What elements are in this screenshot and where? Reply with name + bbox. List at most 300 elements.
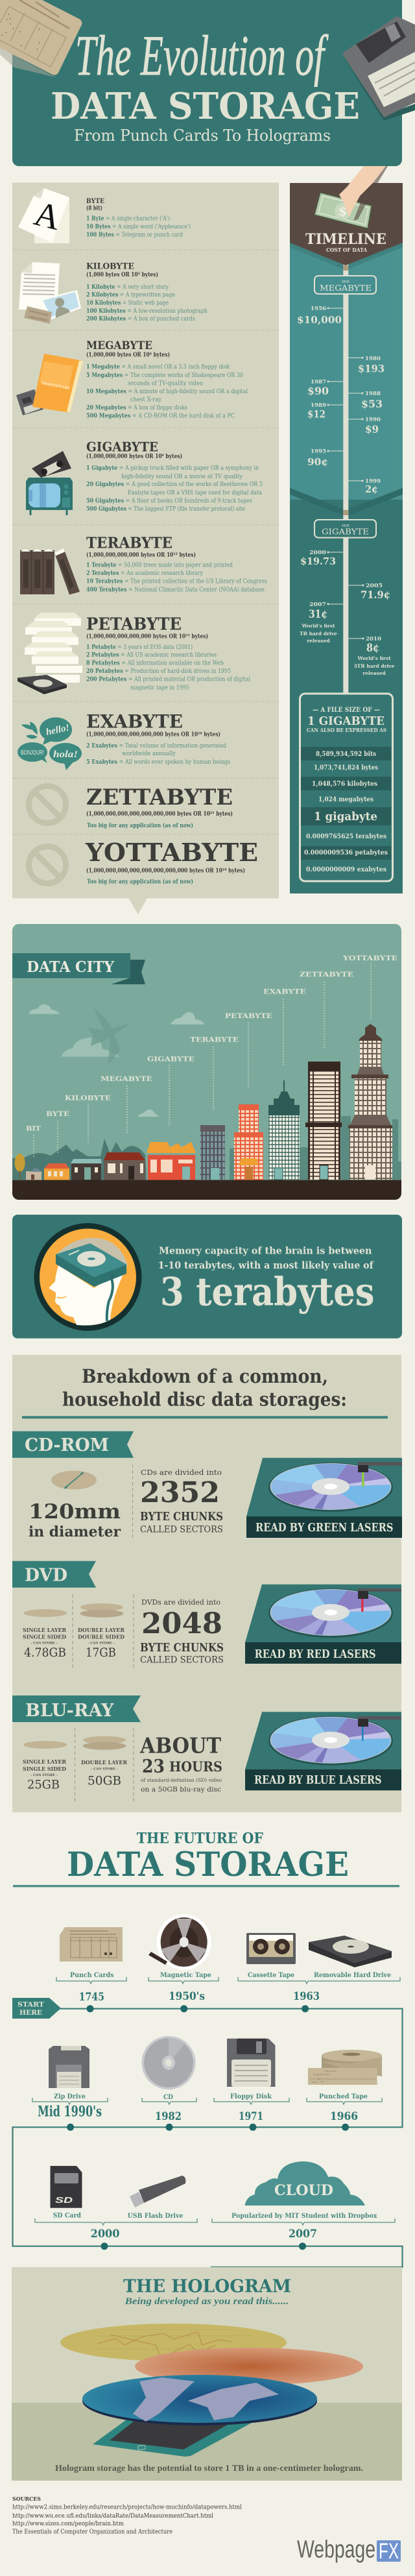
item: zip drive mid 1990's: Zip Drive <box>54 2093 86 2100</box>
city labels: KILOBYTE <box>65 1095 111 1102</box>
timeline ticks <box>328 308 363 638</box>
block: exabyte <box>86 711 230 766</box>
stat: about 23 hours: HOURS <box>169 1758 222 1775</box>
stat: dvd single layer: - CAN STORE - <box>30 1642 58 1646</box>
timeline: 1989: $12 <box>307 408 326 420</box>
background skyline <box>230 1116 401 1180</box>
block: megabyte <box>86 339 248 420</box>
badge: per megabyte: PER <box>342 280 350 284</box>
stat: blu-ray double layer: 50GB <box>88 1774 121 1788</box>
timeline: 2007: released <box>307 638 330 644</box>
sources: The Essentials of Computer Organization and Architecture <box>12 2529 172 2536</box>
block: gigabyte: Exabyte tapes OR a VHS tape used for digital data <box>128 490 263 496</box>
timeline: 1999: 1999 <box>365 478 381 485</box>
block: gigabyte: GIGABYTE <box>86 439 158 455</box>
heading: the future of data storage: THE FUTURE OF <box>137 1830 263 1847</box>
caption: Hologram storage has the potential to store 1 TB in a one-centimeter hologram. <box>55 2464 363 2473</box>
block: exabyte: 5 Exabytes = All words ever spoken by human beings <box>86 759 230 766</box>
background hills <box>12 1139 147 1180</box>
item: zip drive mid 1990's <box>38 2046 102 2120</box>
block: petabyte: 1 Petabyte = 3 years of EOS data (2001) <box>86 644 193 651</box>
item: cloud 2007: CLOUD <box>274 2182 333 2199</box>
icon: cd diameter <box>51 1470 97 1490</box>
timeline: 1995 <box>307 448 328 468</box>
panel: timeline <box>290 166 403 893</box>
item: cassette tape: Cassette Tape <box>248 1972 294 1979</box>
timeline: 2005: 2005 <box>366 583 383 589</box>
house: bit <box>26 1167 42 1180</box>
timeline: 1989: 1989 <box>311 402 326 409</box>
item: usb flash drive 2000: USB Flash Drive <box>128 2213 183 2220</box>
hologram disc: globe <box>82 2375 317 2425</box>
text: memory capacity: Memory capacity of the brain is between <box>159 1245 372 1256</box>
block: petabyte: 8 Petabytes = All information available on the Web <box>86 661 224 667</box>
device: blue laser: READ BY BLUE LASERS <box>254 1773 382 1787</box>
block: gigabyte: 1 Gigabyte = A pickup truck filled with paper OR a symphony in <box>86 465 259 472</box>
icon: vhs tape and tv <box>26 451 73 515</box>
city labels: MEGABYTE <box>101 1075 152 1083</box>
house: gigabyte <box>147 1142 196 1180</box>
box: file size conversions: 1,073,741,824 bytes <box>314 764 378 772</box>
dotted guide lines <box>34 964 371 1158</box>
building: petabyte <box>234 1104 263 1180</box>
block: gigabyte: 20 Gigabytes = A good collection of the works of Beethoven OR 5 <box>86 481 263 488</box>
item: cd 1982: CD <box>163 2094 173 2101</box>
stat: dvd double layer: DOUBLE LAYER <box>78 1627 124 1633</box>
stat: dvd single layer: 4.78GB <box>24 1646 66 1660</box>
stat: 2352: CALLED SECTORS <box>140 1525 223 1535</box>
dashed separators <box>73 1464 134 1802</box>
block: zettabyte <box>86 784 233 829</box>
sources: http://www2.sims.berkeley.edu/research/projects/how-muchinfo/datapowers.html <box>12 2505 242 2511</box>
block: petabyte: 2 Petabytes = All US academic research libraries <box>86 652 217 659</box>
block: megabyte: 10 Megabytes = A minute of high-fidelity sound OR a digital <box>86 389 248 395</box>
box: file size conversions: 0.0009765625 terabytes <box>306 833 386 840</box>
stat: blu-ray double layer: - CAN STORE - <box>91 1768 118 1771</box>
timeline path <box>13 2009 402 2267</box>
icon: speech bubbles: hello! <box>45 723 71 738</box>
icon: airplane <box>86 1008 132 1064</box>
timeline: 2005: 71.9¢ <box>361 589 390 601</box>
icon: speech bubbles <box>18 718 82 770</box>
logo: webpagefx: FX <box>379 2539 399 2564</box>
item: usb flash drive 2000 <box>91 2176 185 2241</box>
block: megabyte: (1,000,000 bytes OR 10⁶ bytes) <box>86 352 170 359</box>
block: zettabyte: ZETTABYTE <box>86 784 233 810</box>
item: removable hard drive 1963: 1963 <box>293 1990 320 2003</box>
sources: SOURCES <box>12 2496 41 2503</box>
block: exabyte: (1,000,000,000,000,000,000 bytes OR 10¹⁸ bytes) <box>86 731 220 738</box>
house: kilobyte <box>71 1159 102 1180</box>
block: byte: 10 Bytes = A single word ('Applesauce') <box>86 223 191 230</box>
stat: blu-ray single layer: SINGLE LAYER <box>23 1758 66 1765</box>
icon: no symbol zettabyte <box>29 786 66 823</box>
stat: 2352 <box>140 1468 223 1535</box>
block: yottabyte: Too big for any application (as of now) <box>87 879 193 886</box>
block: petabyte: (1,000,000,000,000,000 bytes OR 10¹⁵ bytes) <box>86 633 208 640</box>
stat: 2048 <box>140 1598 224 1666</box>
city labels: EXABYTE <box>263 988 306 995</box>
block: gigabyte: high-fidelity sound OR a movie at TV quality <box>121 474 243 480</box>
block: terabyte: 10 Terabytes = The printed collection of the US Library of Congress <box>86 579 267 585</box>
block: gigabyte: 500 Gigabytes = The biggest FTP (file transfer protocol) site <box>86 505 245 513</box>
timeline: 2010: 3TB hard drive <box>353 663 395 669</box>
ribbon: cd-rom: CD-ROM <box>25 1435 109 1455</box>
header: brown chevron: COST OF DATA <box>326 247 367 254</box>
stat: dvd single layer: SINGLE LAYER <box>23 1627 66 1633</box>
header: brown chevron: TIMELINE <box>305 231 386 248</box>
stat: dvd double layer: DOUBLE SIDED <box>78 1634 124 1640</box>
city labels <box>26 954 397 1133</box>
block: megabyte: 500 Megabytes = A CD-ROM OR the hard disk of a PC <box>86 413 235 420</box>
ribbon: dvd <box>12 1561 96 1588</box>
heading <box>22 1365 388 1418</box>
block: exabyte: EXABYTE <box>86 711 183 733</box>
block: megabyte: MEGABYTE <box>86 339 152 352</box>
block: terabyte: (1,000,000,000,000 bytes OR 10¹² bytes) <box>86 552 196 559</box>
icon: hand with money <box>314 166 388 228</box>
block: megabyte: 1 Megabyte = A small novel OR a 3.5 inch floppy disk <box>86 364 230 371</box>
badge: per gigabyte: GIGABYTE <box>322 528 369 537</box>
stat: dvd double layer <box>78 1603 124 1660</box>
icon: floppy disk <box>342 16 415 121</box>
stat: about 23 hours: of standard-definition (SD) video <box>141 1777 222 1783</box>
timeline: 2007 <box>300 601 337 644</box>
block: petabyte: 200 Petabytes = All printed material OR production of digital <box>86 677 250 683</box>
item: punch cards 1745 <box>60 1927 123 2004</box>
ribbon: dvd: DVD <box>25 1566 67 1586</box>
city labels: GIGABYTE <box>147 1055 195 1063</box>
building: yottabyte <box>348 1024 392 1180</box>
ribbon: data city: DATA CITY <box>27 958 115 976</box>
item: sd card: SD Card <box>53 2213 81 2220</box>
timeline: 2007: World's first <box>301 623 335 629</box>
timeline: 1989 <box>307 402 326 420</box>
header: brown chevron <box>290 166 403 265</box>
building: zettabyte <box>305 1062 342 1180</box>
text: memory capacity: 3 terabytes <box>160 1269 375 1315</box>
heading: the hologram: Being developed as you read this...... <box>124 2296 289 2307</box>
start here marker: HERE <box>19 2009 42 2017</box>
item: punched tape 1966 <box>308 2050 382 2123</box>
block: yottabyte: YOTTABYTE <box>85 838 258 867</box>
timeline: 1980 <box>358 356 385 375</box>
start here marker <box>12 1998 61 2019</box>
timeline dots <box>327 308 364 640</box>
stat: 2352: BYTE CHUNKS <box>140 1510 223 1524</box>
badge: per gigabyte <box>314 520 376 538</box>
stat: blu-ray single layer: SINGLE SIDED <box>23 1766 66 1772</box>
building: exabyte <box>268 1080 300 1180</box>
icon: speech bubbles: BONJOUR! <box>21 749 44 757</box>
item: magnetic tape 1950's: 1950's <box>169 1990 205 2003</box>
block: kilobyte <box>86 262 208 322</box>
block: kilobyte: 10 Kilobytes = Static web page <box>86 300 169 306</box>
start here marker: START <box>18 2001 44 2009</box>
timeline: 1988: $53 <box>361 398 383 410</box>
ground <box>12 1180 401 1200</box>
logo: webpagefx: Webpage <box>297 2536 375 2564</box>
ribbon: blu-ray <box>12 1695 141 1722</box>
item: punched tape 1966: Punched Tape <box>319 2093 368 2100</box>
block: terabyte <box>86 535 267 593</box>
item: punch cards 1745: 1745 <box>79 1991 104 2004</box>
stat: about 23 hours: on a 50GB blu-ray disc <box>141 1786 221 1793</box>
city labels: BIT <box>26 1125 41 1133</box>
box: file size conversions: — A FILE SIZE OF — <box>313 707 380 714</box>
stat: 2352: 2352 <box>140 1476 220 1509</box>
sources: http://www.wu.ece.ufl.edu/links/dataRate/DataMeasurementChart.html <box>12 2513 213 2520</box>
timeline: 2000: 2000 <box>309 550 326 556</box>
box: file size conversions: 0.0000000009 exabytes <box>306 866 386 873</box>
timeline: 2007: 31¢ <box>309 608 327 621</box>
block: kilobyte: 2 Kilobytes = A typewritten page <box>86 292 175 298</box>
item: magnetic tape 1950's <box>148 1914 211 2003</box>
stat: 120mm: 120mm <box>29 1500 121 1524</box>
stat: dvd double layer: 17GB <box>86 1646 116 1660</box>
city labels: ZETTABYTE <box>300 971 353 978</box>
block: kilobyte: (1,000 bytes OR 10³ bytes) <box>86 271 158 278</box>
item: floppy disk 1971: 1971 <box>239 2110 263 2123</box>
item: cassette tape <box>246 1933 296 1979</box>
heading: household disc data storages: <box>62 1389 347 1411</box>
block: exabyte: 2 Exabytes = Total volume of information generated <box>86 743 226 749</box>
item: floppy disk 1971 <box>227 2039 275 2123</box>
sources <box>12 2496 242 2536</box>
stat: dvd single layer <box>23 1609 67 1660</box>
icon: document and photo <box>19 262 81 324</box>
timeline: 1999 <box>365 478 381 495</box>
timeline: 1956: 1956 <box>311 306 326 312</box>
box: file size conversions: CAN ALSO BE EXPRESSED AS <box>307 727 386 733</box>
stat: 120mm <box>29 1500 121 1540</box>
heading: the future of data storage <box>13 1830 399 1887</box>
panel: data city <box>12 924 401 1200</box>
stat: dvd double layer: - CAN STORE - <box>88 1642 115 1646</box>
stat: 2352: CDs are divided into <box>141 1468 222 1477</box>
block: kilobyte: KILOBYTE <box>86 262 134 272</box>
timeline: 2010 <box>353 636 395 676</box>
block: gigabyte <box>86 439 263 513</box>
block: kilobyte: 200 Kilobytes = A box of punched cards <box>86 316 195 322</box>
item: floppy disk 1971: Floppy Disk <box>230 2093 272 2100</box>
block: petabyte: magnetic tape in 1995 <box>130 685 189 692</box>
stat: 2048: CALLED SECTORS <box>140 1655 224 1666</box>
box: file size conversions: 1 gigabyte <box>314 810 377 823</box>
stat: 2048: DVDs are divided into <box>141 1598 220 1607</box>
timeline: 2010: 2010 <box>366 636 381 642</box>
stat: blu-ray single layer: - CAN STORE - <box>30 1773 58 1777</box>
badge: per gigabyte: PER <box>342 524 350 528</box>
timeline: 2005 <box>361 583 390 601</box>
stat: dvd single layer: SINGLE SIDED <box>23 1634 66 1640</box>
block: kilobyte: 1 Kilobyte = A very short story <box>86 284 169 291</box>
icon: paper letter A <box>18 188 69 243</box>
timeline: 2010: released <box>362 670 386 676</box>
block: zettabyte: Too big for any application (as of now) <box>87 822 193 829</box>
hologram disc: chart <box>60 2324 287 2361</box>
city labels: PETABYTE <box>225 1012 272 1020</box>
item: usb flash drive 2000: 2000 <box>91 2228 120 2241</box>
block: megabyte: chest X-ray <box>130 397 162 404</box>
icon: paper letter A: A <box>30 193 64 237</box>
stat: blu-ray single layer <box>23 1741 67 1792</box>
ribbon: cd-rom <box>12 1431 134 1458</box>
panel: header <box>0 0 415 166</box>
subtitle: From Punch Cards To Holograms <box>74 127 331 145</box>
item: sd card <box>51 2166 82 2220</box>
item: cd 1982 <box>141 2036 196 2123</box>
icon: book and floppy <box>16 354 83 415</box>
panel: units of data <box>12 183 279 914</box>
brackets <box>32 1977 400 2225</box>
sources: http://www.sizes.com/people/brain.htm <box>12 2521 124 2527</box>
box: file size conversions: 1,048,576 kilobytes <box>312 781 377 788</box>
item: cd 1982: 1982 <box>155 2110 182 2123</box>
icon: no symbol yottabyte <box>29 846 66 884</box>
timeline: 1980: 1980 <box>365 356 381 362</box>
box: file size conversions <box>300 694 393 881</box>
panel: the hologram <box>12 2267 402 2481</box>
block: terabyte: 1 Terabyte = 50,000 trees made into paper and printed <box>86 563 233 569</box>
device: red laser <box>245 1585 401 1664</box>
timeline: 1990 <box>365 417 381 435</box>
hologram disc: orange <box>135 2348 363 2385</box>
icon: punch card <box>0 0 82 77</box>
tablet <box>93 2396 290 2457</box>
panel: disc breakdown <box>12 1355 402 1812</box>
block: kilobyte: 100 Kilobytes = A low-resolution photograph <box>86 308 208 315</box>
device: red laser: READ BY RED LASERS <box>255 1647 376 1661</box>
tree <box>15 1154 25 1180</box>
stat: about 23 hours: 23 <box>142 1756 165 1777</box>
item: punched tape 1966: 1966 <box>330 2110 358 2123</box>
heading: the future of data storage: DATA STORAGE <box>67 1845 349 1884</box>
device: green laser <box>246 1458 402 1538</box>
stat: 120mm: in diameter <box>29 1524 121 1540</box>
timeline: 2010: World's first <box>357 655 391 661</box>
title: data storage: DATA STORAGE <box>51 85 360 128</box>
building: terabyte <box>200 1125 225 1180</box>
timeline: 1999: 2¢ <box>365 483 378 495</box>
block: byte: BYTE <box>86 198 104 205</box>
block: petabyte: 20 Petabytes = Production of hard-disk drives in 1995 <box>86 668 231 675</box>
item: removable hard drive 1963 <box>293 1936 392 2003</box>
box: file size conversions: 0.0000009536 petabytes <box>304 849 388 857</box>
timeline nodes <box>67 2005 349 2250</box>
stat: 2048: 2048 <box>141 1607 222 1640</box>
block: yottabyte <box>85 838 258 886</box>
item: sd card: SD <box>55 2195 73 2205</box>
heading: Breakdown of a common, <box>82 1365 328 1387</box>
city labels: TERABYTE <box>190 1036 239 1043</box>
stat: about 23 hours <box>139 1733 222 1793</box>
block: terabyte: 2 Terabytes = An academic research library <box>86 570 204 577</box>
item: cloud 2007 <box>231 2161 378 2241</box>
icon: book and floppy: SHAKESPEARE <box>42 382 70 391</box>
item: magnetic tape 1950's: Magnetic Tape <box>160 1972 211 1979</box>
box: file size conversions: 1,024 megabytes <box>318 796 374 803</box>
ribbon: data city <box>12 953 145 984</box>
item: removable hard drive 1963: Removable Hard Drive <box>314 1972 391 1979</box>
heading: the hologram <box>123 2277 291 2307</box>
item: cloud 2007: 2007 <box>289 2228 317 2241</box>
timeline: 1956: $10,000 <box>297 314 342 326</box>
block: petabyte: PETABYTE <box>86 615 182 635</box>
timeline: 2007: TB hard drive <box>300 631 337 637</box>
block: terabyte: 400 Terabytes = National Climactic Data Center (NOAA) database <box>86 587 265 593</box>
icon: hand with money: $ <box>338 204 347 219</box>
timeline: 1987: 1987 <box>311 379 326 385</box>
block: exabyte: worldwide annually <box>122 751 176 757</box>
stat: blu-ray double layer <box>81 1736 127 1788</box>
block: byte: 100 Bytes = Telegram or punch card <box>86 232 183 239</box>
block: byte: 1 Byte = A single character ('A') <box>86 215 170 223</box>
text: memory capacity: 1-10 terabytes, with a most likely value of <box>158 1259 374 1271</box>
timeline: 1987 <box>307 379 329 397</box>
timeline: 1990: 1990 <box>365 417 381 423</box>
device: blue laser <box>245 1712 401 1790</box>
timeline: 1980: $193 <box>358 363 385 375</box>
block: megabyte: 5 Megabytes = The complete works of Shakespeare OR 30 <box>86 372 243 379</box>
block: megabyte: 20 Megabytes = A box of floppy disks <box>86 405 187 411</box>
item: punch cards 1745: Punch Cards <box>70 1972 114 1979</box>
timeline: 1987: $90 <box>307 385 329 397</box>
badge: per megabyte <box>314 276 376 294</box>
city labels: YOTTABYTE <box>342 954 397 962</box>
item: zip drive mid 1990's: Mid 1990's <box>38 2104 102 2120</box>
timeline: 1988: 1988 <box>365 391 381 397</box>
icon: stack of paper and hard drive <box>18 613 82 694</box>
badge: per megabyte: MEGABYTE <box>320 284 372 293</box>
timeline: 1995: 90¢ <box>307 456 328 468</box>
panel: brain capacity <box>12 1215 402 1339</box>
ribbon: blu-ray: BLU-RAY <box>25 1701 114 1721</box>
box: file size conversions: 1 GIGABYTE <box>307 714 385 728</box>
icon: speech bubbles: hola! <box>53 749 78 760</box>
block: zettabyte: (1,000,000,000,000,000,000,000 bytes OR 10²¹ bytes) <box>86 810 233 818</box>
block: petabyte <box>86 615 250 692</box>
timeline: 2000 <box>300 550 336 567</box>
house: byte <box>44 1163 69 1180</box>
block: byte: (8 bit) <box>86 205 102 212</box>
stat: 2048: BYTE CHUNKS <box>140 1641 224 1655</box>
heading: the hologram: THE HOLOGRAM <box>123 2277 291 2297</box>
block: megabyte: seconds of TV-quality video <box>128 381 203 387</box>
block: byte <box>86 198 191 239</box>
block: gigabyte: (1,000,000,000 bytes OR 10⁹ bytes) <box>86 453 182 460</box>
icon: head with hard drive <box>34 1223 141 1331</box>
icon: books <box>20 548 80 594</box>
stat: blu-ray single layer: 25GB <box>27 1778 60 1792</box>
block: yottabyte: (1,000,000,000,000,000,000,000,000 bytes OR 10²⁴ bytes) <box>86 867 245 875</box>
stat: blu-ray double layer: DOUBLE LAYER <box>81 1759 127 1766</box>
text: memory capacity <box>158 1245 374 1315</box>
house: megabyte <box>104 1152 145 1180</box>
block: gigabyte: 50 Gigabytes = A floor of books OR hundreds of 9-track tapes <box>86 498 252 505</box>
block: terabyte: TERABYTE <box>86 535 172 552</box>
timeline: 2000: $19.73 <box>300 555 336 567</box>
timeline: 1995: 1995 <box>311 448 326 455</box>
timeline: 1956 <box>297 306 342 326</box>
timeline: 2007: 2007 <box>309 601 326 608</box>
timeline: 1988 <box>361 391 383 410</box>
timeline: 1990: $9 <box>365 423 379 435</box>
item: cloud 2007: Popularized by MIT Student with Dropbox <box>231 2213 378 2220</box>
stat: about 23 hours: ABOUT <box>139 1733 221 1758</box>
timeline: 2010: 8¢ <box>366 642 379 655</box>
clouds <box>29 1004 205 1117</box>
